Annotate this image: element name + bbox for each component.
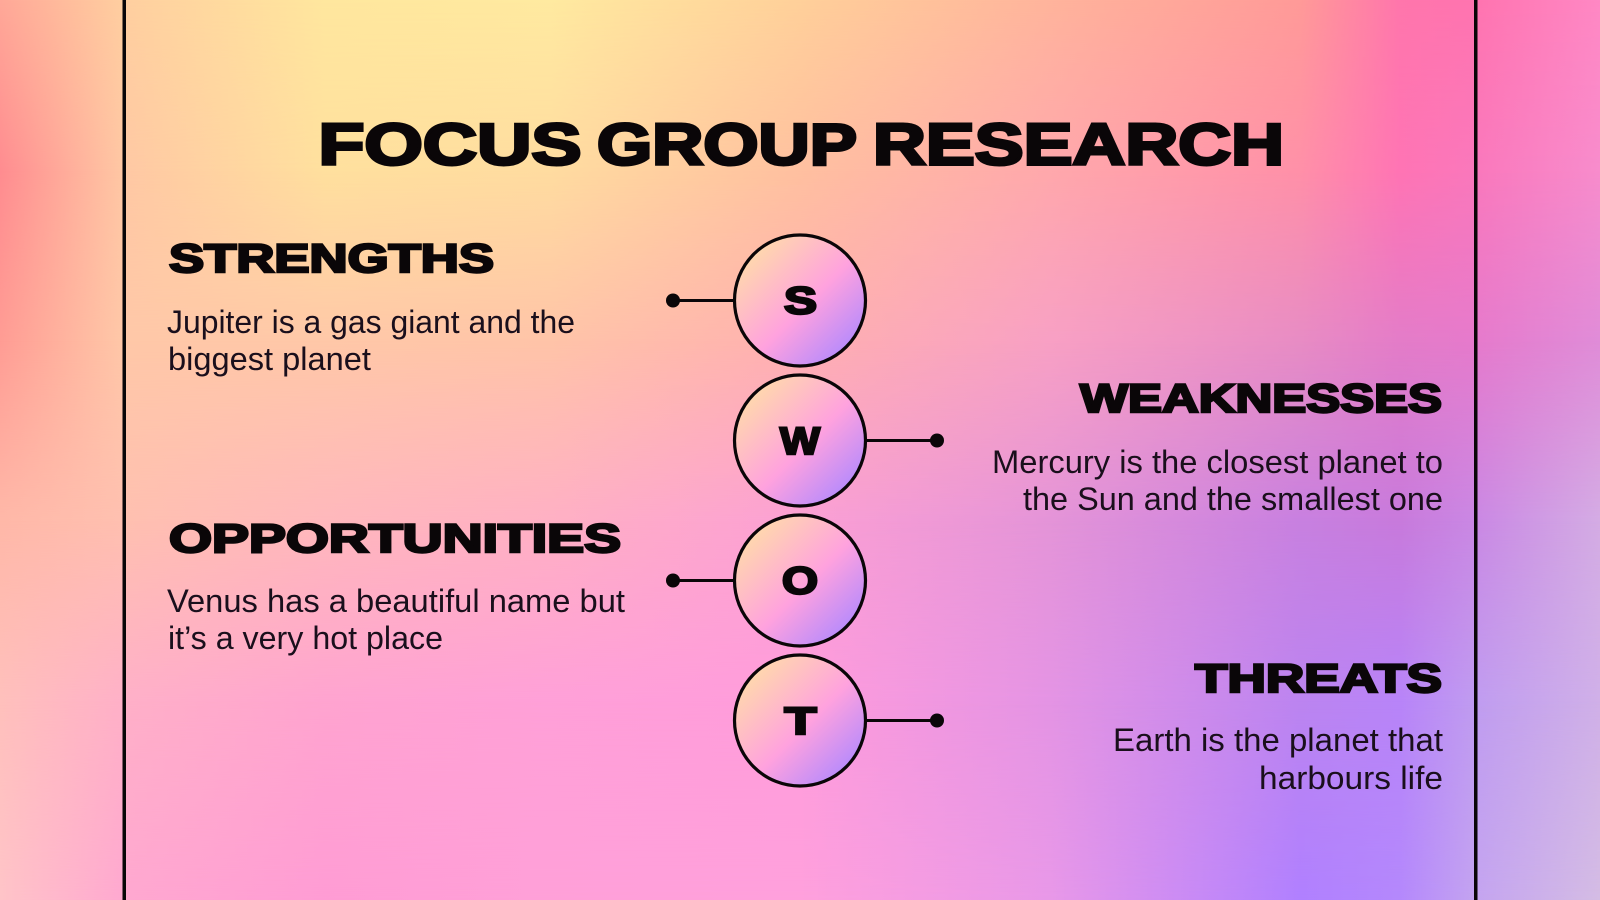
circle: T: T — [784, 701, 816, 743]
circle: O — [734, 515, 866, 646]
text: opportunities description — [167, 583, 625, 656]
circle: S: S — [784, 280, 817, 322]
text: strengths description: Jupiter is a gas giant and the — [167, 304, 575, 340]
panel: weaknesses — [992, 377, 1443, 517]
frame: right vertical line — [1474, 0, 1478, 900]
heading: opportunities: OPPORTUNITIES — [169, 517, 621, 561]
panel: opportunities — [167, 517, 625, 656]
heading: weaknesses: WEAKNESSES — [1080, 377, 1442, 421]
heading: threats: THREATS — [1195, 657, 1442, 701]
heading: strengths: STRENGTHS — [169, 237, 494, 281]
circle: O: O — [782, 560, 818, 602]
text: strengths description: biggest planet — [168, 341, 371, 377]
title: RESEARCH — [873, 112, 1284, 178]
connector: O — [666, 574, 735, 588]
circle: W: W — [780, 421, 820, 463]
text: threats description: Earth is the planet that — [1113, 722, 1443, 758]
text: opportunities description: it’s a very hot place — [168, 620, 443, 656]
text: opportunities description: Venus has a beautiful name but — [167, 583, 625, 619]
connector: W — [865, 434, 944, 448]
title: GROUP — [597, 112, 857, 178]
connector: T — [865, 714, 944, 728]
panel: threats — [1113, 657, 1443, 796]
circle: S — [734, 235, 866, 366]
text: threats description — [1113, 722, 1443, 796]
circle: W — [734, 375, 866, 506]
panel: strengths — [167, 237, 575, 377]
frame: left vertical line — [122, 0, 126, 900]
text: threats description: harbours life — [1259, 760, 1443, 796]
connector: S — [666, 294, 735, 308]
text: weaknesses description: the Sun and the smallest one — [1023, 481, 1443, 517]
text: strengths description — [167, 304, 575, 377]
text: weaknesses description: Mercury is the closest planet to — [992, 444, 1443, 480]
text: weaknesses description — [992, 444, 1443, 517]
title — [318, 112, 1284, 178]
circle: T — [734, 655, 866, 786]
title: FOCUS — [318, 112, 582, 178]
